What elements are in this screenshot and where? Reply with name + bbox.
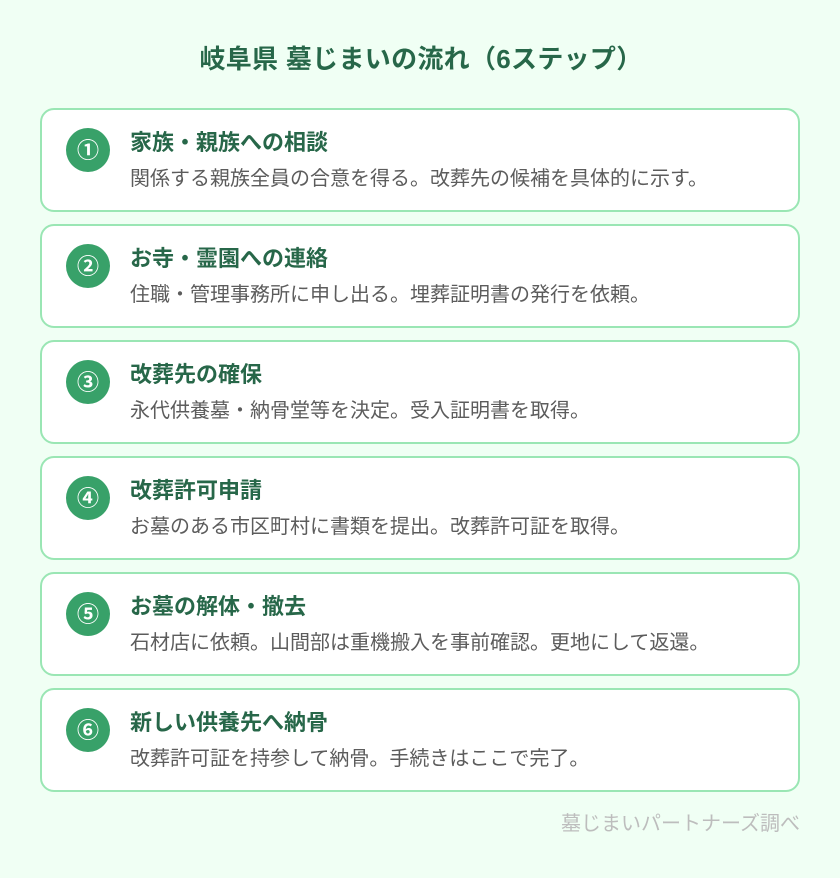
step 3 number badge [66, 360, 110, 404]
step 5 heading: お墓の解体・撤去 [130, 594, 306, 619]
step 4 heading: 改葬許可申請 [130, 478, 262, 503]
step 4 description: お墓のある市区町村に書類を提出。改葬許可証を取得。 [130, 516, 630, 538]
step 6 number badge [66, 708, 110, 752]
step 4 number badge [66, 476, 110, 520]
panel: step 1 [40, 108, 800, 212]
panel: step 4 [40, 456, 800, 560]
step 2 heading: お寺・霊園への連絡 [130, 246, 328, 271]
title: 岐阜県 墓じまいの流れ（6ステップ） [199, 44, 643, 74]
step 5 number badge [66, 592, 110, 636]
step 3 number badge: ③ [77, 370, 99, 395]
step 6 number badge: ⑥ [77, 718, 99, 743]
step 3 heading: 改葬先の確保 [130, 362, 262, 387]
step 6 description: 改葬許可証を持参して納骨。手続きはここで完了。 [130, 748, 589, 770]
step 2 number badge: ② [77, 254, 99, 279]
step 5 number badge: ⑤ [77, 602, 99, 627]
step 1 description: 関係する親族全員の合意を得る。改葬先の候補を具体的に示す。 [130, 168, 708, 190]
panel: step 2 [40, 224, 800, 328]
source note: 墓じまいパートナーズ調べ [561, 813, 800, 835]
step 6 heading: 新しい供養先へ納骨 [130, 710, 328, 735]
step 5 description: 石材店に依頼。山間部は重機搬入を事前確認。更地にして返還。 [130, 632, 709, 654]
step 1 number badge [66, 128, 110, 172]
step 2 description: 住職・管理事務所に申し出る。埋葬証明書の発行を依頼。 [130, 284, 650, 306]
step 1 number badge: ① [77, 138, 99, 163]
panel: step 5 [40, 572, 800, 676]
panel: step 3 [40, 340, 800, 444]
step 4 number badge: ④ [77, 486, 99, 511]
step 3 description: 永代供養墓・納骨堂等を決定。受入証明書を取得。 [130, 400, 590, 422]
step 1 heading: 家族・親族への相談 [130, 130, 328, 155]
panel: step 6 [40, 688, 800, 792]
step 2 number badge [66, 244, 110, 288]
